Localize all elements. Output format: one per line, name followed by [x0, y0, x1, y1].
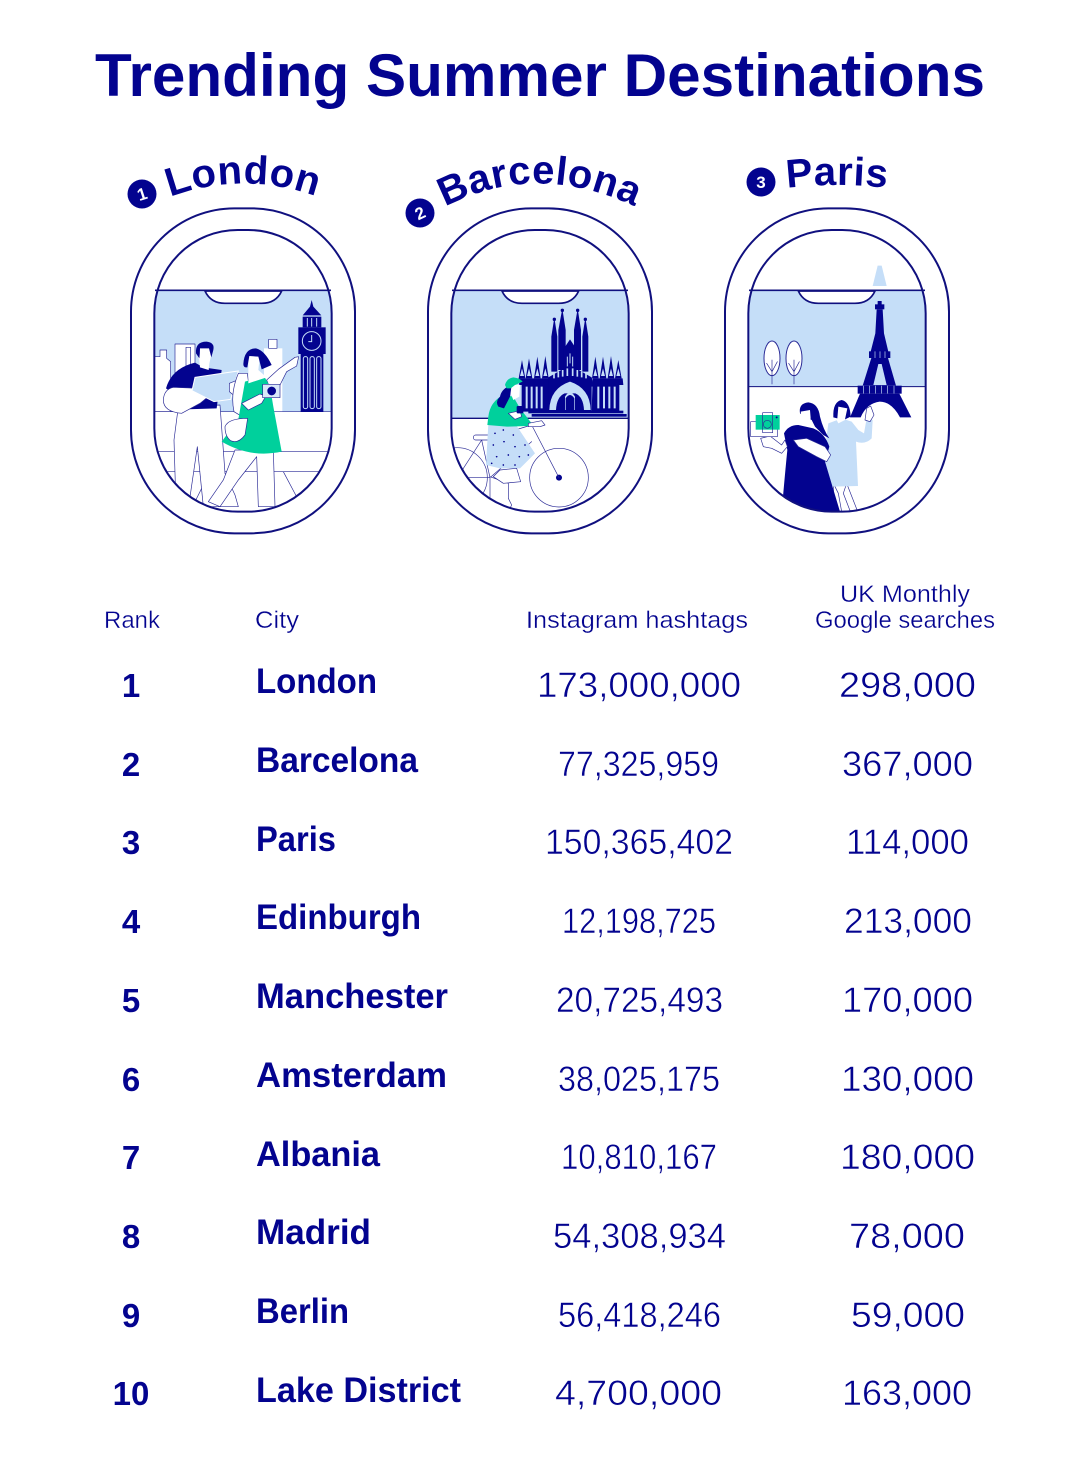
table row: Albania [122, 1135, 975, 1177]
table row: Lake District [113, 1371, 972, 1413]
table row: Berlin: 56,418,246 [558, 1296, 721, 1335]
table row: London: 1 [122, 667, 140, 704]
heading: 1 London [128, 155, 318, 208]
table row: Barcelona: 367,000 [842, 745, 973, 784]
table row: Manchester: 20,725,493 [556, 981, 723, 1020]
table row: Edinburgh: 12,198,725 [562, 902, 716, 941]
heading: 2 Barcelona: 2 [412, 203, 429, 224]
table row: Madrid: 8 [122, 1218, 140, 1255]
table row: Amsterdam: Amsterdam [256, 1056, 447, 1095]
window: Barcelona scene [427, 208, 652, 533]
table row: Berlin [122, 1292, 965, 1335]
man with map [163, 342, 239, 508]
heading: 1 London: London [164, 155, 318, 196]
window shade notch [502, 291, 579, 303]
table row: London: London [256, 662, 377, 701]
table row: Paris [122, 820, 969, 862]
table header: Instagram hashtags [526, 607, 748, 634]
table row: Lake District: Lake District [256, 1371, 461, 1410]
table row: Barcelona: Barcelona [256, 741, 419, 780]
table row: Berlin: 59,000 [851, 1296, 965, 1335]
trees [764, 341, 802, 384]
table header: UK Monthly [840, 581, 970, 608]
icon: Big Ben [298, 300, 326, 412]
bicycle and rider [454, 377, 589, 508]
table row: Paris: 3 [122, 824, 140, 861]
table header [104, 581, 995, 634]
city buildings [154, 339, 332, 512]
heading: 3 Paris [746, 156, 886, 196]
table row: Madrid: 54,308,934 [553, 1217, 726, 1256]
table row: Albania: 180,000 [840, 1138, 975, 1177]
icon: Sagrada Familia [518, 309, 627, 417]
table row: Edinburgh: 213,000 [844, 902, 972, 941]
table row: Madrid: Madrid [256, 1213, 371, 1252]
table row: Barcelona: 77,325,959 [558, 745, 719, 784]
table row: Madrid [122, 1213, 965, 1256]
table row: Lake District: 4,700,000 [555, 1374, 722, 1413]
table row: Barcelona: 2 [122, 746, 140, 783]
table row: Paris: Paris [256, 820, 336, 859]
table row: Albania: 10,810,167 [561, 1138, 717, 1177]
table row: Madrid: 78,000 [849, 1217, 965, 1256]
heading: 1 London: 1 [135, 184, 150, 205]
table row: Lake District: 10 [113, 1375, 149, 1412]
table row: Albania: 7 [122, 1139, 140, 1176]
window shade notch [205, 291, 282, 303]
table row: Berlin: Berlin [256, 1292, 349, 1331]
table row: Berlin: 9 [122, 1297, 140, 1334]
heading: 2 Barcelona: Barcelona [436, 156, 638, 206]
table row: Manchester [122, 977, 973, 1020]
table row: Amsterdam [122, 1056, 974, 1099]
table row: London: 298,000 [839, 666, 976, 705]
table row: Edinburgh: 4 [122, 903, 141, 940]
woman in navy dress with camera [751, 402, 840, 512]
table row: Lake District: 163,000 [842, 1374, 972, 1413]
table row: Manchester: 170,000 [842, 981, 973, 1020]
woman with camera [208, 348, 299, 507]
table row: Amsterdam: 130,000 [841, 1060, 974, 1099]
table row: Amsterdam: 38,025,175 [558, 1060, 720, 1099]
table header: City [255, 607, 299, 634]
table row: Paris: 114,000 [846, 823, 969, 862]
table row: Barcelona [122, 741, 973, 784]
table row: Edinburgh [122, 898, 972, 941]
window: Paris scene [725, 208, 949, 533]
table row: Manchester: 5 [122, 982, 140, 1019]
heading: 3 Paris: 3 [756, 173, 766, 192]
heading: 3 Paris: Paris [787, 156, 886, 188]
table row: London [122, 662, 976, 705]
table row: Edinburgh: Edinburgh [256, 898, 421, 937]
table row: Manchester: Manchester [256, 977, 448, 1016]
table header: Google searches [815, 607, 995, 634]
icon: Eiffel Tower [850, 301, 911, 417]
table row: Amsterdam: 6 [122, 1061, 140, 1098]
icon: green camera [751, 413, 780, 437]
heading: 2 Barcelona [406, 156, 638, 228]
table row: Albania: Albania [256, 1135, 381, 1174]
table row: London: 173,000,000 [537, 666, 741, 705]
window: London scene [131, 208, 355, 533]
title: Trending Summer Destinations [95, 42, 985, 109]
woman in pale dress [822, 400, 874, 512]
window shade notch [798, 291, 875, 303]
table row: Paris: 150,365,402 [545, 823, 733, 862]
table header: Rank [104, 607, 161, 634]
